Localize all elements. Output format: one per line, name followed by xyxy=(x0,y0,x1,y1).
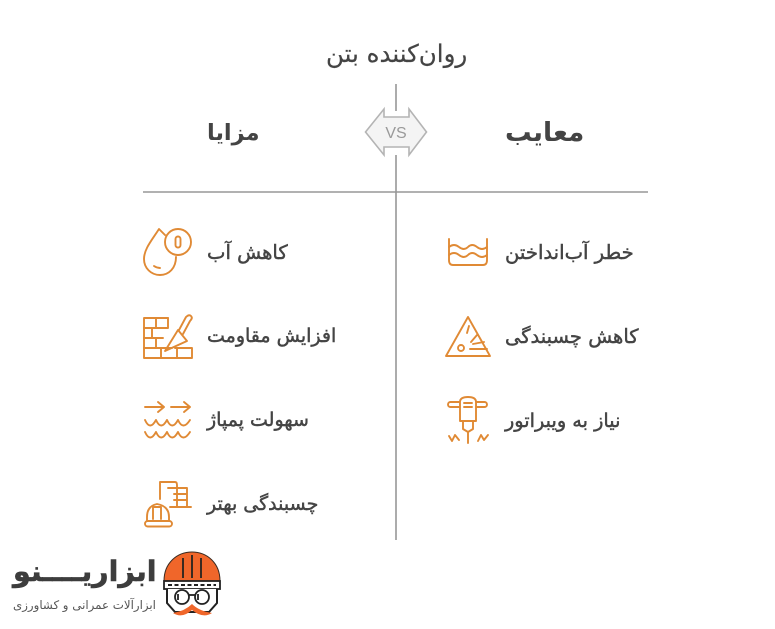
panel: disadvantages xyxy=(504,240,639,432)
title: روان‌کننده بتن xyxy=(326,39,467,68)
logo wordmark: ابزاریــــنو xyxy=(13,555,157,588)
vs badge: VS xyxy=(385,125,407,142)
item label: better adhesion: چسبندگی بهتر xyxy=(207,493,318,515)
logo tagline: ابزارآلات عمرانی و کشاورزی xyxy=(13,598,156,612)
panel: advantages xyxy=(206,240,336,515)
heading: disadvantages: معایب xyxy=(505,117,584,148)
heading: advantages: مزایا xyxy=(207,120,260,146)
item label: increased strength: افزایش مقاومت xyxy=(207,325,336,347)
item label: vibrator need: نیاز به ویبراتور xyxy=(505,409,620,432)
item label: reduced adhesion: کاهش چسبندگی xyxy=(505,325,639,348)
item label: water reduction: کاهش آب xyxy=(207,241,288,264)
item label: segregation risk: خطر آب‌انداختن xyxy=(505,241,634,264)
item label: easier pumping: سهولت پمپاژ xyxy=(207,409,309,431)
